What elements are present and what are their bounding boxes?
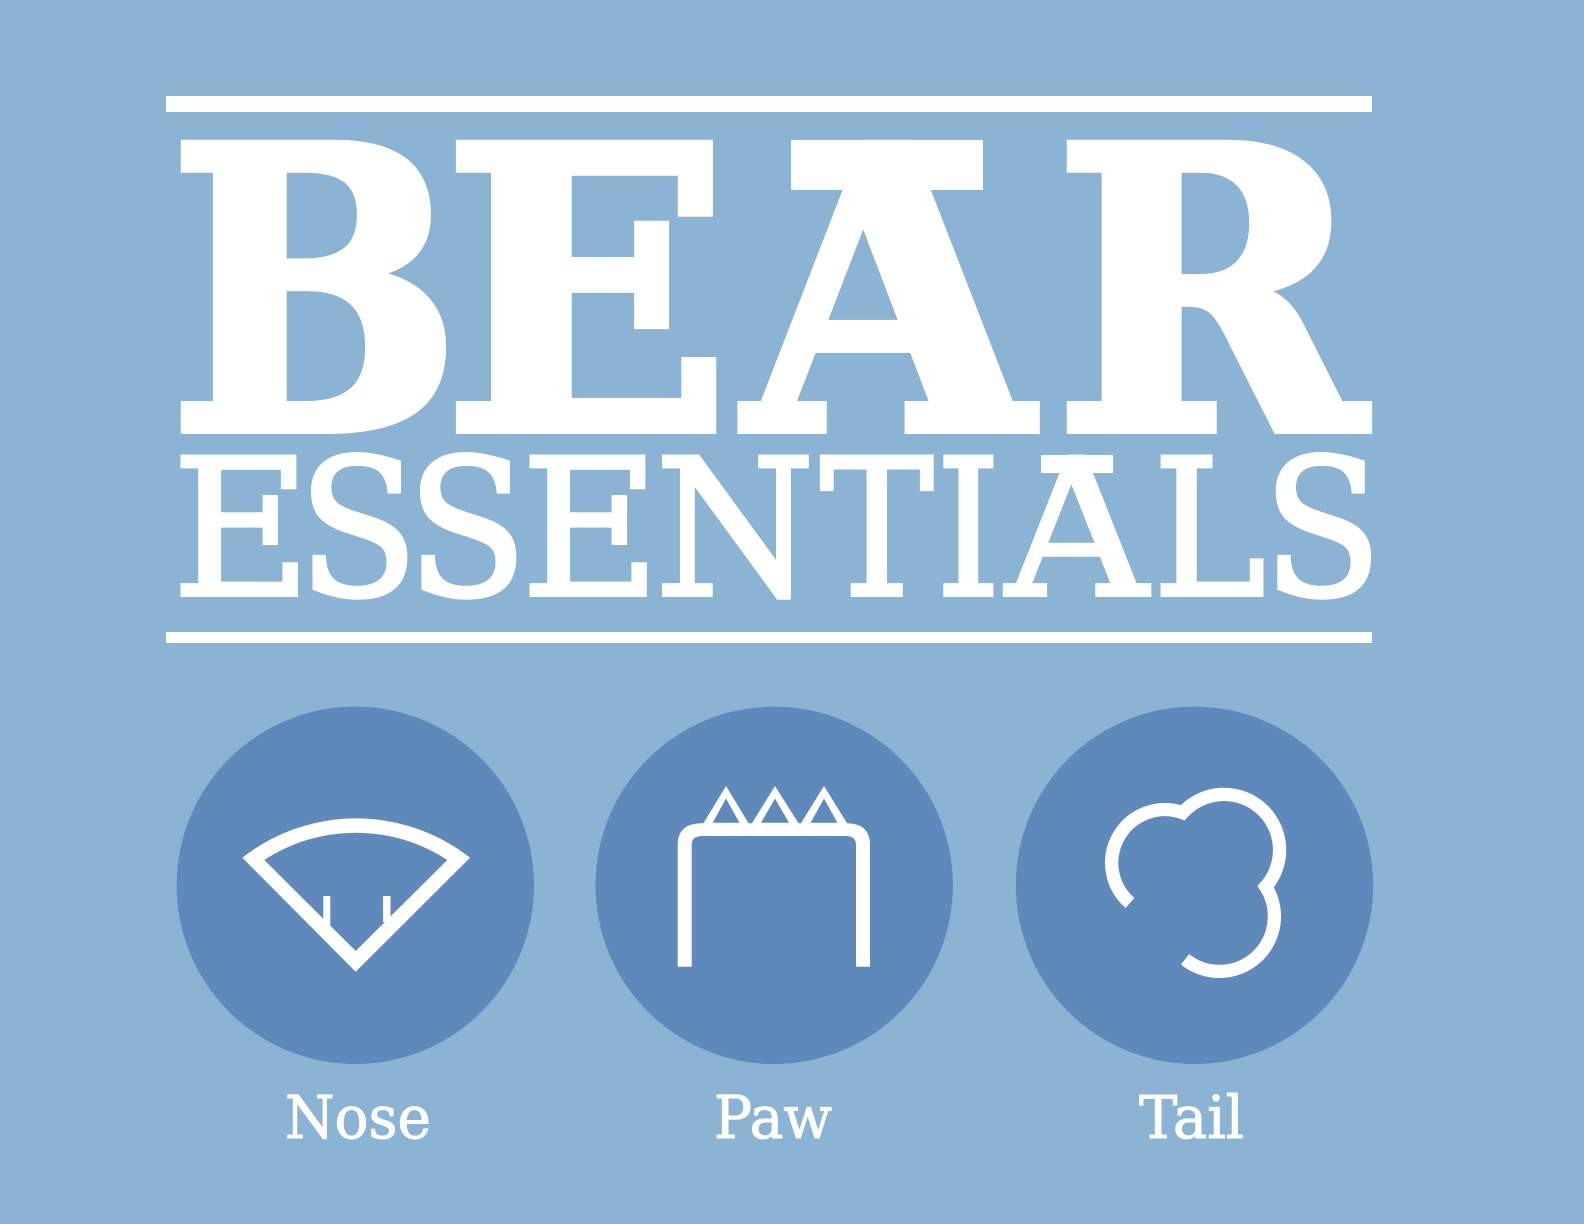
icon: bear tail: [1112, 794, 1280, 971]
label: Paw: Paw: [714, 1083, 832, 1152]
label: Nose: Nose: [285, 1083, 431, 1152]
title line: ESSENTIALS: E: [521, 419, 660, 640]
panel: tail: [1016, 706, 1374, 1152]
title line: ESSENTIALS: T: [820, 419, 933, 640]
title line: ESSENTIALS: S: [407, 419, 527, 640]
icon: bear nose: [242, 818, 470, 972]
circle: nose background: [177, 707, 534, 1064]
circle: tail background: [1016, 707, 1373, 1064]
title line: BEAR: E: [443, 62, 731, 520]
title line: ESSENTIALS: [172, 419, 1382, 640]
title block: [166, 62, 1382, 643]
title line: ESSENTIALS: E: [172, 419, 311, 640]
panel: nose: [176, 706, 534, 1152]
title line: ESSENTIALS: N: [655, 419, 815, 640]
panel: paw: [596, 706, 953, 1152]
title line: ESSENTIALS: I: [936, 419, 1001, 640]
label: Tail: Tail: [1139, 1083, 1244, 1152]
title line: ESSENTIALS: L: [1153, 419, 1266, 640]
title line: BEAR: B: [169, 62, 461, 520]
circle: paw background: [596, 707, 953, 1064]
bottom rule: [166, 632, 1372, 643]
title line: BEAR: A: [745, 62, 1031, 520]
title line: ESSENTIALS: S: [1263, 419, 1382, 640]
title line: ESSENTIALS: A: [1006, 419, 1147, 640]
icon: bear paw: [678, 786, 870, 967]
title line: BEAR: R: [1054, 62, 1365, 520]
title line: ESSENTIALS: S: [298, 419, 418, 640]
top rule: [166, 96, 1372, 112]
title line: BEAR: [169, 62, 1372, 520]
